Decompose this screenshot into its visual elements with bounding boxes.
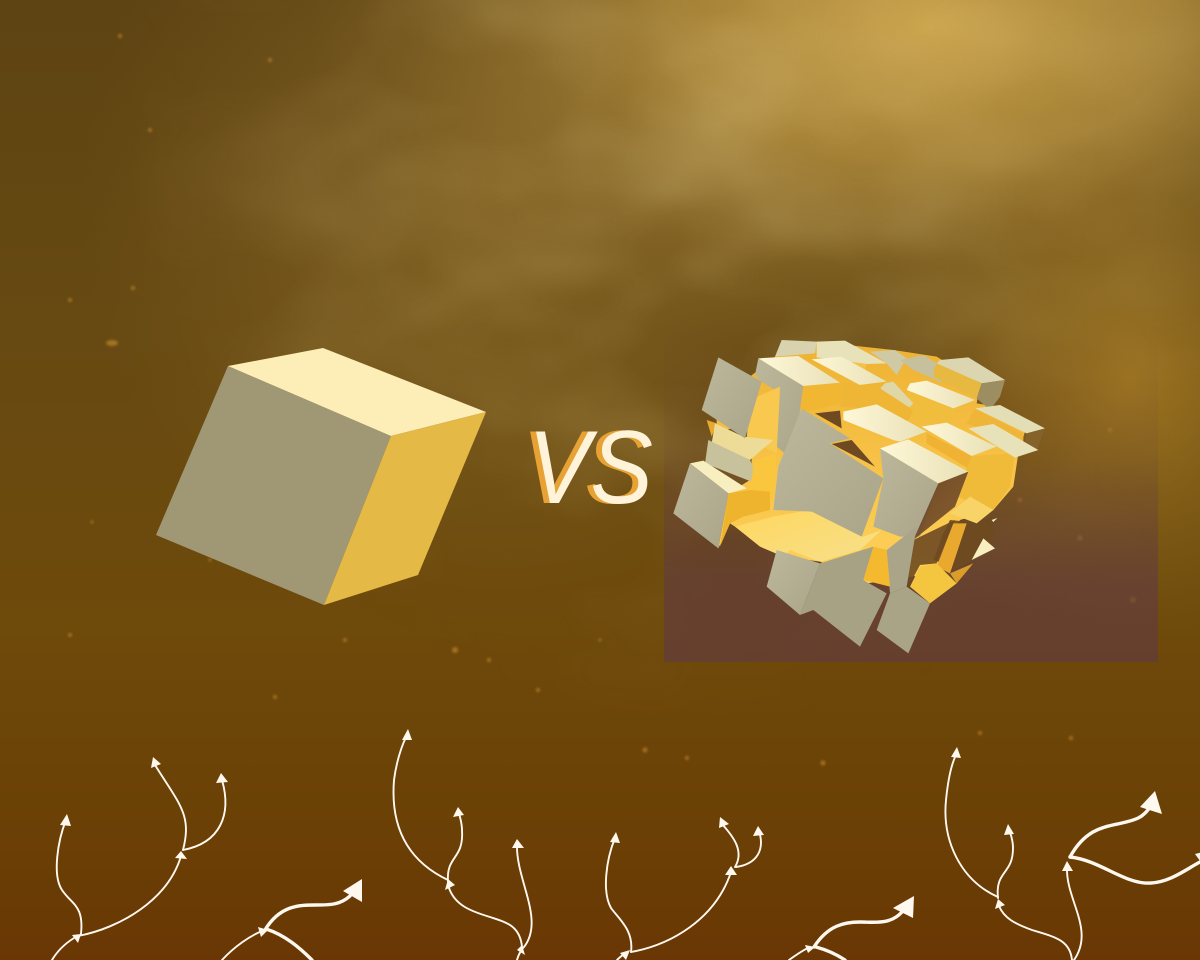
arrows: thick right pair <box>1070 791 1200 883</box>
background particles <box>68 34 1136 766</box>
tinted square behind fractured cube <box>664 320 1158 662</box>
icon: fractured cube <box>673 340 1045 653</box>
arrows: thin left tree <box>52 757 268 960</box>
bottom grey blocks <box>767 527 957 653</box>
arrows: second tree <box>393 729 532 960</box>
large centre panel <box>773 408 883 537</box>
VS label: VS <box>522 408 647 525</box>
arrows: third tree <box>606 817 815 960</box>
gold core <box>717 342 1025 583</box>
VS label: VS <box>528 408 653 525</box>
lower gold shelf <box>735 510 882 562</box>
front right block <box>873 439 968 540</box>
arrows: thick second pair <box>814 896 914 960</box>
back top blocks <box>775 340 1045 450</box>
left column block <box>755 356 913 463</box>
icon: solid cube <box>156 348 486 605</box>
internal dark gaps <box>815 411 993 587</box>
arrows: fourth tree <box>945 747 1082 960</box>
top cream tiles <box>843 404 1038 523</box>
left panels <box>673 357 780 548</box>
lower right gold pieces <box>937 518 997 583</box>
arrows: thick first pair <box>265 879 362 960</box>
